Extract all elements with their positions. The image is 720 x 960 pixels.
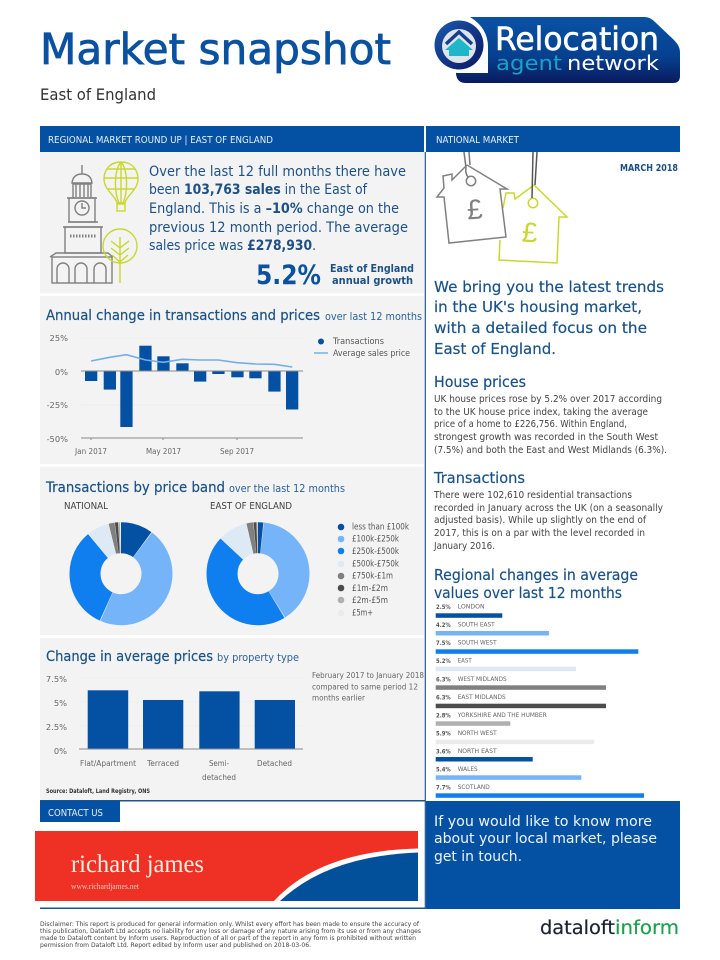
note: period	[312, 670, 424, 702]
note: period: compared to same period 12	[312, 682, 418, 692]
legend: price bands: £500k-£750k	[352, 560, 400, 570]
call to action panel	[426, 801, 680, 909]
chart: property type bars: Terraced	[146, 758, 179, 768]
heading: house prices: House prices	[434, 373, 526, 391]
chart: regional bars: 2.5%	[436, 604, 451, 611]
disclaimer: this publication, Dataloft Ltd accepts no liability for any loss or damage of any nature arising from its use or from any changes	[40, 928, 421, 935]
disclaimer: permission from Dataloft Ltd. Report edited by Inform user and published on 2018-03-06.	[40, 942, 311, 949]
text block: national intro: East of England.	[434, 340, 556, 358]
legend: price bands: £250k-£500k	[352, 547, 400, 557]
text block: transactions: adjusted basis). While up slightly on the end of	[434, 515, 647, 526]
logo: Relocation agent network: network	[567, 51, 659, 75]
chart: regional bars: WALES	[458, 766, 478, 773]
icon: clock tower	[50, 165, 113, 283]
callout: annual growth: East of England	[330, 263, 414, 275]
date: MARCH 2018	[620, 163, 678, 174]
chart: regional bars: 7.7%	[436, 784, 451, 792]
legend: price bands: £1m-£2m	[352, 584, 388, 594]
chart: regional bars: EAST MIDLANDS	[458, 694, 506, 701]
chart: transactions bars and price line: 25%	[50, 333, 68, 343]
legend: annual change	[314, 337, 410, 359]
text block: sales summary: sales price was £278,930.	[149, 238, 316, 254]
disclaimer: Disclaimer: This report is produced for general information only. Whilst every effort has been made to ensure the accuracy of	[40, 921, 420, 928]
chart: regional bars: 5.9%	[436, 730, 451, 738]
text block: sales summary: Over the last 12 full months there have	[149, 164, 406, 180]
text block: transactions: January 2016.	[433, 541, 495, 552]
contact us tab: CONTACT US	[48, 808, 103, 819]
chart: regional bars: LONDON	[458, 604, 485, 610]
text block: transactions	[433, 490, 663, 552]
chart: regional bars: WEST MIDLANDS	[458, 676, 507, 683]
chart: east of england donut	[222, 538, 294, 610]
call to action panel: If you would like to know more	[434, 814, 652, 830]
heading: annual change: over last 12 months	[325, 311, 422, 323]
chart: regional bars: 6.3%	[436, 694, 451, 702]
text block: house prices: (7.5%) and both the East and West Midlands (6.3%).	[434, 445, 667, 456]
panel: change in average prices	[40, 638, 424, 800]
disclaimer	[40, 921, 421, 949]
label: east of england: EAST OF ENGLAND	[210, 501, 292, 512]
text block: sales summary: been 103,763 sales in the East of	[149, 182, 368, 198]
chart: regional bars: 3.6%	[436, 748, 451, 756]
chart: transactions bars and price line: Sep 2017	[220, 446, 254, 456]
chart: property type bars: Flat/Apartment	[80, 758, 137, 768]
text block: house prices: price of a home to £226,756. Within England,	[434, 419, 627, 430]
icon: house price tags: £	[466, 193, 484, 226]
subtitle: East of England	[40, 85, 156, 104]
text block: house prices: UK house prices rose by 5.2% over 2017 according	[434, 394, 662, 405]
callout: annual growth: 5.2%	[256, 260, 321, 291]
agent banner: richard james: richard james	[71, 851, 204, 878]
chart: regional bars: 4.2%	[436, 622, 451, 629]
chart: regional bars: SOUTH WEST	[458, 640, 497, 646]
heading: price band	[45, 480, 345, 496]
panel: annual change	[40, 296, 424, 464]
text block: house prices	[434, 394, 667, 456]
heading: regional changes	[434, 566, 638, 602]
chart: regional bars: SOUTH EAST	[458, 622, 495, 628]
legend: annual change: Average sales price	[333, 349, 410, 359]
heading: average prices: by property type	[217, 652, 299, 664]
chart: regional bars: YORKSHIRE AND THE HUMBER	[457, 712, 547, 719]
text block: transactions: recorded in January across the UK (on a seasonally	[434, 503, 663, 514]
text block: house prices: to the UK house price index, taking the average	[434, 407, 648, 418]
panel: regional header bar: REGIONAL MARKET ROUND UP | EAST OF ENGLAND	[48, 135, 273, 146]
legend: price bands: £750k-£1m	[352, 572, 393, 582]
icon: house price tags	[437, 152, 567, 263]
contact us tab	[40, 801, 120, 822]
heading: price band: Transactions by price band	[45, 480, 225, 496]
chart: property type bars: 7.5%	[46, 674, 67, 684]
callout: annual growth: annual growth	[332, 275, 413, 287]
legend: price bands: less than £100k	[352, 522, 410, 532]
agent banner: richard james: www.richardjames.net	[71, 881, 140, 891]
chart: property type bars: Semi-	[209, 758, 229, 768]
chart: transactions bars and price line: May 2017	[146, 446, 181, 456]
panel: regional header bar	[40, 126, 424, 152]
title: Market snapshot	[40, 25, 391, 75]
chart: regional bars: EAST	[458, 658, 472, 664]
chart: transactions bars and price line: -25%	[47, 400, 68, 410]
text block: national intro: with a detailed focus on the	[434, 319, 647, 337]
panel: national header bar	[426, 126, 680, 152]
panel: market round up	[40, 152, 424, 293]
logo: dataloft inform: dataloft	[540, 918, 615, 939]
panel: national header bar: NATIONAL MARKET	[436, 135, 520, 146]
heading: average prices: Change in average prices	[46, 649, 213, 665]
callout: annual growth	[256, 260, 414, 291]
chart: transactions bars and price line: -50%	[47, 434, 68, 444]
chart: property type bars	[46, 674, 303, 782]
text block: transactions: 2017, this is on a par with the level recorded in	[434, 528, 645, 539]
text block: transactions: There were 102,610 residential transactions	[433, 490, 632, 501]
chart: property type bars: 2.5%	[46, 722, 67, 732]
heading: price band: over the last 12 months	[229, 483, 345, 495]
chart: regional bars: 6.3%	[436, 676, 451, 684]
logo: Relocation agent network: Relocation	[495, 20, 659, 58]
chart: regional bars: NORTH EAST	[458, 748, 497, 755]
call to action panel: about your local market, please	[434, 831, 657, 847]
text block: national intro: in the UK's housing market,	[434, 298, 642, 316]
legend: price bands: £2m-£5m	[352, 596, 388, 606]
chart: regional bars: SCOTLAND	[458, 784, 490, 791]
logo: Relocation agent network: agent	[496, 51, 562, 75]
text block: national intro	[434, 278, 664, 358]
text block: sales summary: previous 12 month period. The average	[149, 220, 408, 236]
chart: transactions bars and price line: Jan 2017	[74, 446, 107, 456]
logo: Relocation agent network	[434, 17, 680, 83]
disclaimer: made to Dataloft content by Inform users. Reproduction of all or part of the report in any form is prohibited without written	[40, 935, 416, 942]
chart: regional bars: 5.2%	[436, 658, 451, 665]
chart: property type bars: detached	[202, 772, 236, 782]
chart: property type bars: 0%	[54, 746, 67, 756]
note: period: February 2017 to January 2018	[312, 670, 424, 680]
chart: national donut	[85, 538, 157, 610]
legend: price bands	[338, 522, 410, 618]
call to action panel: get in touch.	[434, 849, 522, 865]
source: Source: Dataloft, Land Registry, ONS	[46, 788, 150, 795]
agent banner: richard james	[35, 831, 418, 901]
panel: transactions by price band	[40, 467, 424, 635]
chart: transactions bars and price line: 0%	[55, 367, 68, 377]
legend: annual change: Transactions	[332, 337, 384, 347]
chart: regional bars: 5.4%	[436, 766, 451, 774]
heading: annual change: Annual change in transactions and prices	[46, 308, 320, 324]
legend: price bands: £100k-£250k	[352, 534, 400, 544]
note: period: months earlier	[312, 692, 366, 702]
text block: house prices: strongest growth was recorded in the South West	[434, 432, 658, 443]
logo: dataloft inform	[540, 918, 679, 939]
legend: price bands: £5m+	[352, 608, 373, 618]
chart: regional bars: 2.8%	[436, 712, 451, 720]
heading: regional changes: values over last 12 months	[434, 584, 622, 602]
chart: property type bars: Detached	[257, 758, 292, 768]
text block: sales summary: England. This is a –10% change on the	[149, 201, 399, 217]
text block: sales summary	[149, 164, 408, 254]
icon: tree	[103, 229, 137, 283]
text block: national intro: We bring you the latest trends	[434, 278, 664, 296]
chart: regional bars	[436, 604, 644, 798]
icon: hot air balloon	[104, 162, 138, 211]
label: national: NATIONAL	[64, 501, 109, 512]
heading: transactions: Transactions	[433, 469, 525, 487]
chart: transactions bars and price line	[47, 333, 303, 456]
chart: regional bars: NORTH WEST	[458, 730, 497, 737]
chart: property type bars: 5%	[54, 698, 67, 708]
chart: regional bars: 7.5%	[436, 640, 451, 647]
logo: dataloft inform: inform	[615, 918, 679, 939]
icon: house price tags: £	[521, 216, 539, 249]
heading: regional changes: Regional changes in average	[434, 566, 638, 584]
